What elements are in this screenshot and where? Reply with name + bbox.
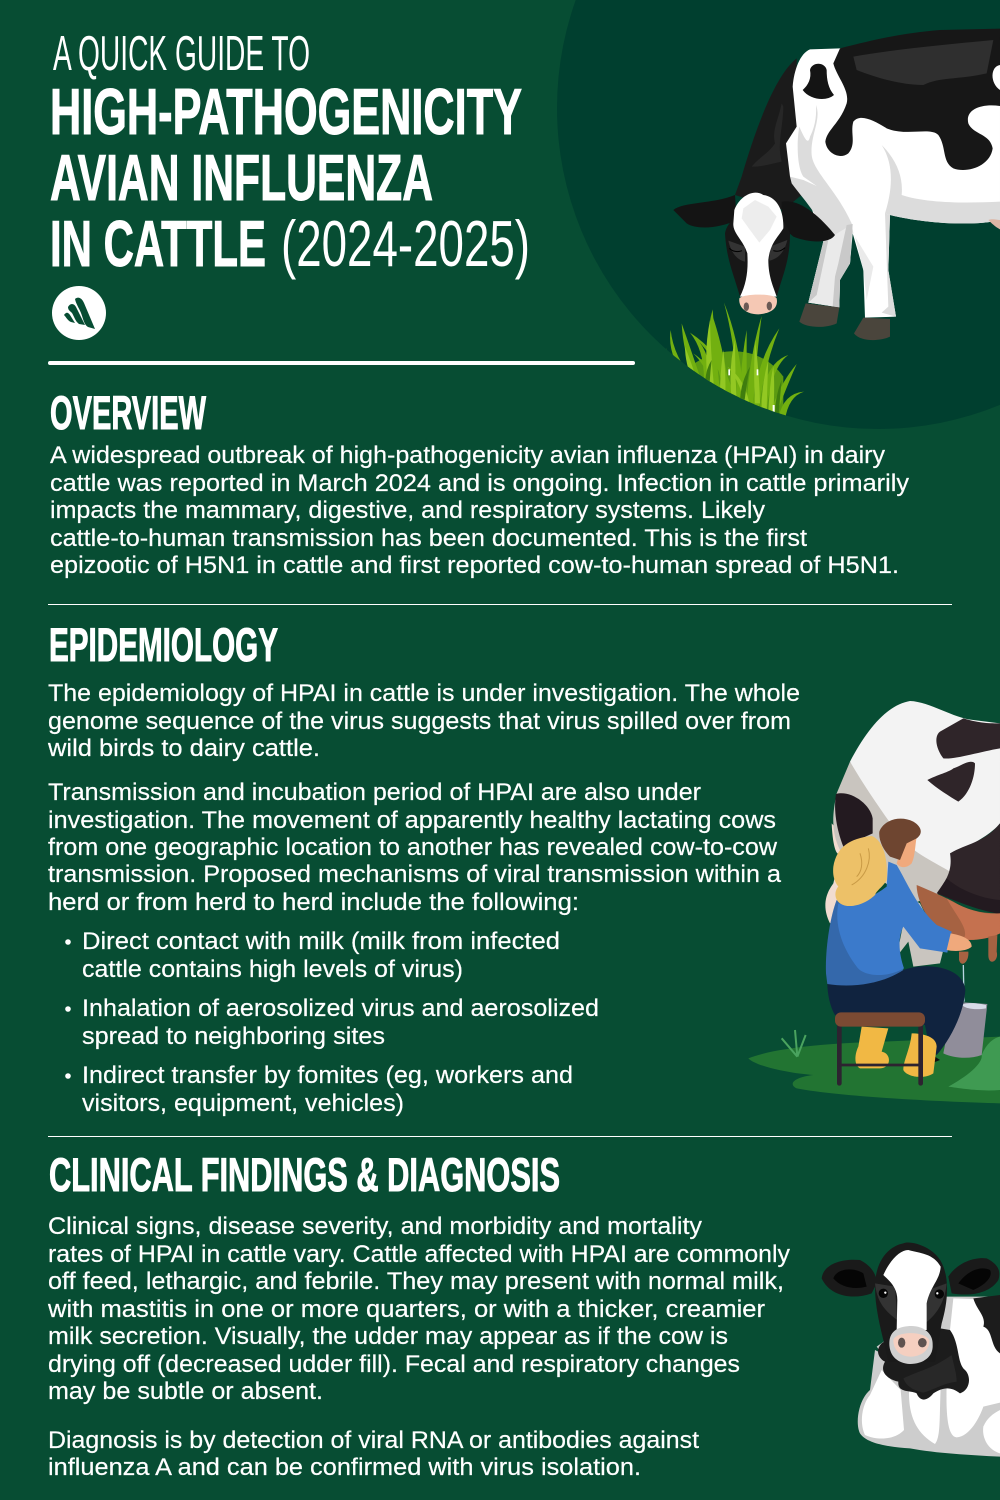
text: overview paragraph: impacts the mammary, digestive, and respiratory systems. Likely: [50, 497, 766, 524]
cow hooves: [799, 303, 890, 340]
text: overview paragraph: cattle-to-human transmission has been documented. This is the first: [50, 525, 807, 552]
text: clinical paragraph: milk secretion. Visually, the udder may appear as if the cow is: [48, 1323, 728, 1350]
panel: overview: [50, 386, 910, 579]
list: transmission mechanisms: spread to neighboring sites: [82, 1023, 385, 1050]
title: AVIAN INFLUENZA: [50, 141, 433, 214]
list: transmission mechanisms: Direct contact with milk (milk from infected: [82, 928, 560, 955]
title: (2024-2025): [281, 207, 530, 280]
icon: logo: [52, 286, 106, 340]
heading: epidemiology: EPIDEMIOLOGY: [49, 618, 278, 671]
cow black patch: [825, 29, 1000, 170]
text: epidemiology paragraph 2: Transmission and incubation period of HPAI are also under: [48, 779, 701, 806]
text: clinical paragraph: with mastitis in one or more quarters, or with a thicker, creamier: [47, 1296, 765, 1323]
cow ears: [673, 195, 835, 241]
list: transmission mechanisms: cattle contains high levels of virus): [82, 956, 463, 983]
panel: clinical findings and diagnosis: [47, 1148, 791, 1481]
cow shading: [790, 105, 1000, 317]
cow: [825, 701, 1000, 967]
cow head: [725, 193, 790, 314]
text: epidemiology paragraph 2: herd or from herd to herd include the following:: [48, 889, 579, 916]
title: HIGH-PATHOGENICITY: [50, 75, 522, 148]
text: epidemiology paragraph 1: genome sequence of the virus suggests that virus spilled over from: [48, 708, 791, 735]
illustration: grass: [666, 303, 804, 420]
calf head: [875, 1243, 947, 1364]
text: epidemiology paragraph 1: The epidemiology of HPAI in cattle is under investigation. The whole: [48, 680, 800, 707]
text: clinical paragraph: Clinical signs, disease severity, and morbidity and mortality: [48, 1213, 703, 1240]
text: clinical paragraph: may be subtle or absent.: [48, 1378, 323, 1405]
cow body: [786, 40, 1000, 318]
text: clinical paragraph: off feed, lethargic, and febrile. They may present with normal milk,: [48, 1268, 784, 1295]
text: epidemiology paragraph 1: wild birds to dairy cattle.: [47, 735, 320, 762]
calf ears: [822, 1258, 999, 1297]
dark background circle: [557, 0, 1000, 429]
text: clinical paragraph: [47, 1213, 791, 1405]
panel: epidemiology: [47, 618, 800, 1117]
farmer: [826, 819, 972, 1063]
heading: overview: OVERVIEW: [50, 386, 206, 439]
text: clinical paragraph: drying off (decreased udder fill). Fecal and respiratory changes: [48, 1351, 740, 1378]
list: transmission mechanisms: Inhalation of aerosolized virus and aerosolized: [82, 995, 599, 1022]
text: diagnosis paragraph: Diagnosis is by detection of viral RNA or antibodies against: [48, 1427, 699, 1454]
illustration: resting calf: [822, 1243, 1000, 1457]
heading: clinical findings and diagnosis: CLINICAL FINDINGS & DIAGNOSIS: [49, 1148, 560, 1201]
ground: [748, 1030, 1000, 1103]
text: diagnosis paragraph: influenza A and can be confirmed with virus isolation.: [48, 1454, 641, 1481]
stool and boots: [835, 1012, 937, 1083]
list: transmission mechanisms: visitors, equipment, vehicles): [82, 1090, 404, 1117]
list: transmission mechanisms: Indirect transfer by fomites (eg, workers and: [82, 1062, 573, 1089]
text: epidemiology paragraph 2: investigation. The movement of apparently healthy lactating cows: [48, 807, 776, 834]
calf body: [858, 1295, 1000, 1457]
list: transmission mechanisms: [65, 928, 599, 1117]
text: diagnosis paragraph: [48, 1427, 699, 1481]
cow spot: [803, 64, 834, 99]
text: overview paragraph: epizootic of H5N1 in cattle and first reported cow-to-human spread of H5N1.: [50, 552, 899, 579]
title: A QUICK GUIDE TO: [53, 27, 310, 81]
text: epidemiology paragraph 2: transmission. Proposed mechanisms of viral transmission within a: [48, 861, 781, 888]
text: overview paragraph: A widespread outbreak of high-pathogenicity avian influenza (HPAI) in dairy: [50, 442, 886, 469]
illustration: grazing cow: [673, 29, 1000, 340]
title: IN CATTLE: [50, 207, 266, 280]
title: [50, 27, 530, 280]
text: epidemiology paragraph 1: [47, 680, 800, 762]
illustration: farmer milking cow: [748, 701, 1000, 1103]
text: clinical paragraph: rates of HPAI in cattle vary. Cattle affected with HPAI are commonly: [48, 1241, 791, 1268]
text: epidemiology paragraph 2: from one geographic location to another has revealed cow-to-cow: [48, 834, 777, 861]
milk bucket: [943, 1002, 987, 1058]
text: epidemiology paragraph 2: [48, 779, 781, 916]
cow neck: [735, 58, 806, 210]
text: overview paragraph: cattle was reported in March 2024 and is ongoing. Infection in cattle primarily: [50, 470, 910, 497]
text: overview paragraph: [50, 442, 910, 579]
